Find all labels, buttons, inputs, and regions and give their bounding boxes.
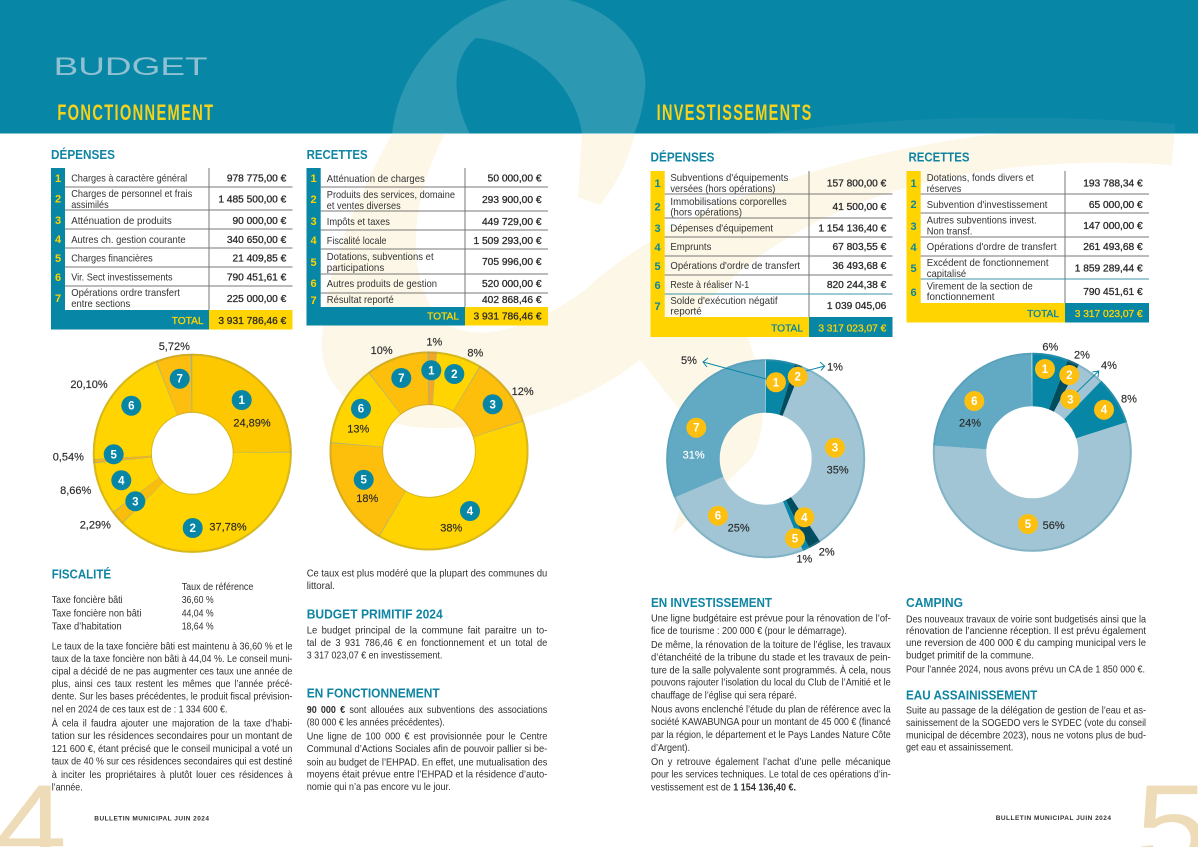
text block: en investissement: De même, la rénovation de la toiture de l’église, les travaux <box>651 639 891 651</box>
table: dépenses fonctionnement: 3 <box>55 215 61 227</box>
table: dépenses investissements: 4 <box>655 242 662 254</box>
text block: en investissement: On y retrouve également l’achat d’une pelle mécanique <box>651 756 891 768</box>
table: dépenses fonctionnement: 1 <box>55 173 61 185</box>
table: recettes investissements: Non transf. <box>927 226 972 238</box>
text block: taux modéré: Ce taux est plus modéré que la plupart des communes du <box>307 568 547 580</box>
chart: donut dépenses fonctionnement: 5 <box>110 449 117 461</box>
chart: donut recettes fonctionnement: 3 <box>489 399 496 411</box>
text block: eau assainissement: get eau et assainissement. <box>906 742 1013 754</box>
table: dépenses investissements: 41 500,00 € <box>832 202 887 213</box>
chart: donut recettes fonctionnement: 5 <box>360 475 367 487</box>
table: recettes investissements: 147 000,00 € <box>1083 221 1143 232</box>
text block: fiscalité: Taux de référence <box>182 581 254 593</box>
text block: fiscalité: Taxe foncière bâti <box>52 594 123 606</box>
text block: budget primitif 2024: BUDGET PRIMITIF 2024 <box>307 606 443 621</box>
text block: camping <box>906 595 1146 676</box>
chart: donut dépenses fonctionnement: 5,72% <box>159 341 190 353</box>
chart: donut recettes investissements: 6 <box>971 396 978 408</box>
chart: donut dépenses investissements: 3 <box>832 443 838 455</box>
table: dépenses investissements: (hors opérations) <box>670 206 742 218</box>
footer left: BULLETIN MUNICIPAL JUIN 2024 <box>94 816 209 823</box>
table: dépenses investissements: Solde d'exécution négatif <box>670 295 778 307</box>
text block: en investissement: vestissement est de 1 154 136,40 €. <box>651 781 796 793</box>
table: recettes fonctionnement: 3 931 786,46 € <box>474 312 542 323</box>
chart: donut dépenses fonctionnement: 7 <box>176 374 183 386</box>
chart: donut dépenses investissements: 4 <box>801 512 808 524</box>
chart: donut dépenses investissements: 1 <box>773 377 780 389</box>
footer right: BULLETIN MUNICIPAL JUIN 2024 <box>996 815 1111 822</box>
chart: donut recettes fonctionnement: 1 <box>428 365 435 377</box>
table: dépenses fonctionnement: assimilés <box>71 199 109 211</box>
text block: taux modéré <box>307 568 547 592</box>
chart: donut recettes investissements: 8% <box>1121 394 1137 406</box>
text block: en investissement: d’étanchéité de la tribune du stade et les travaux de pein- <box>651 652 891 664</box>
text block: fiscalité: dente. Sur les bases précédentes, le produit fiscal prévision- <box>52 691 293 703</box>
text block: fiscalité: l’année. <box>52 781 83 793</box>
chart: donut dépenses investissements: 2 <box>794 372 801 384</box>
text block: fiscalité: Taxe foncière non bâti <box>52 607 141 619</box>
text block: camping: budget primitif de la commune. <box>906 649 1034 661</box>
chart: donut recettes fonctionnement: 7 <box>398 373 405 385</box>
text block: eau assainissement: EAU ASSAINISSEMENT <box>906 687 1037 702</box>
chart: donut dépenses investissements <box>667 355 864 565</box>
table: dépenses investissements: 2 <box>655 202 661 214</box>
heading: investissements: INVESTISSEMENTS <box>657 100 813 125</box>
table: recettes investissements: 1 <box>911 178 917 190</box>
table: recettes investissements: Dotations, fonds divers et <box>927 172 1034 184</box>
text block: camping: Pour l’année 2024, nous avons prévu un CA de 1 850 000 €. <box>906 664 1145 676</box>
chart: donut recettes fonctionnement: 10% <box>371 345 393 357</box>
table: recettes investissements: 6 <box>911 287 917 299</box>
table: recettes investissements: 3 <box>911 221 917 233</box>
text block: camping: une reversion de 400 000 € du camping municipal vers le <box>906 637 1146 649</box>
chart: donut dépenses investissements: 5 <box>792 533 799 545</box>
chart: donut recettes fonctionnement: 18% <box>356 493 379 505</box>
text block: fiscalité: 18,64 % <box>182 620 214 632</box>
chart: donut recettes fonctionnement: 1% <box>426 337 442 349</box>
table: dépenses fonctionnement: 340 650,00 € <box>227 235 287 246</box>
table: recettes fonctionnement: 2 <box>311 194 317 206</box>
chart: donut recettes investissements: 24% <box>959 418 981 430</box>
table: dépenses investissements: Emprunts <box>670 241 711 253</box>
chart: donut recettes fonctionnement: 4 <box>467 506 474 518</box>
table: dépenses investissements: versées (hors opérations) <box>670 183 775 195</box>
text block: en fonctionnement: Une ligne de 100 000 € est provisionnée pour le Centre <box>307 731 547 743</box>
table: dépenses fonctionnement: 6 <box>55 272 61 284</box>
table: recettes investissements: 5 <box>911 263 917 275</box>
chart: donut recettes investissements: 4 <box>1101 405 1108 417</box>
chart: donut dépenses fonctionnement: 6 <box>128 401 135 413</box>
table: recettes investissements: 65 000,00 € <box>1089 200 1143 211</box>
text block: fiscalité: taux de 40 % sur ces résidences secondaires qui est destiné <box>52 756 293 768</box>
text block: budget primitif 2024: 3 317 023,07 € en investissement. <box>307 649 442 661</box>
chart: donut recettes investissements: 6% <box>1042 341 1058 353</box>
header band <box>0 0 1198 134</box>
table: recettes fonctionnement: TOTAL <box>427 312 459 323</box>
text block: en fonctionnement: 90 000 € sont allouées aux subventions des associations <box>307 704 547 716</box>
chart: donut dépenses fonctionnement: 20,10% <box>70 379 108 391</box>
chart: donut recettes investissements: 2% <box>1074 349 1090 361</box>
text block: fiscalité: À cela il faudra ajouter une majoration de la taxe d’habi- <box>52 716 293 729</box>
table: recettes fonctionnement: 402 868,46 € <box>482 295 542 306</box>
chart: donut recettes investissements: 3 <box>1067 394 1074 406</box>
chart: donut dépenses investissements: 25% <box>728 523 750 535</box>
text block: fiscalité: FISCALITÉ <box>52 566 111 582</box>
text block: budget primitif 2024 <box>307 606 548 661</box>
text block: camping: CAMPING <box>906 595 963 610</box>
text block: en investissement: EN INVESTISSEMENT <box>651 595 772 610</box>
text block: fiscalité: 121 600 €, étant précisé que le conseil municipal a voté un <box>52 743 293 755</box>
table: dépenses investissements: Dépenses d'équipement <box>670 222 773 234</box>
table: dépenses fonctionnement: Vir. Sect investissements <box>71 272 173 284</box>
table: dépenses investissements: 5 <box>655 261 661 273</box>
table: dépenses fonctionnement: 1 485 500,00 € <box>218 194 287 206</box>
panel: fonctionnement recettes <box>306 147 548 326</box>
table: recettes fonctionnement: Impôts et taxes <box>327 216 390 228</box>
text block: en investissement: Une ligne budgétaire est prévue pour la rénovation de l’of- <box>651 613 891 625</box>
chart: donut recettes investissements: 4% <box>1101 360 1117 372</box>
chart: donut dépenses fonctionnement: 2 <box>189 523 196 535</box>
text block: eau assainissement: municipal de décembre 2023), nous ne votons plus de bud- <box>906 729 1146 741</box>
chart: donut dépenses investissements: 35% <box>827 464 849 476</box>
text block: fiscalité: nel en 2024 de ces taux est de : 1 334 600 €. <box>52 703 227 715</box>
table: recettes fonctionnement: 3 <box>311 216 317 228</box>
text block: en investissement: fice de tourisme : 200 000 € (pour le démarrage). <box>651 625 847 637</box>
table: recettes investissements: Opérations d'ordre de transfert <box>927 241 1057 253</box>
text block: camping: rénovation de l’ancienne réception. Il est prévu également <box>906 625 1146 637</box>
table: dépenses investissements: 7 <box>655 301 661 313</box>
text block: budget primitif 2024: Le budget principal de la commune fait paraitre un to- <box>307 625 548 637</box>
table: recettes investissements: 193 788,34 € <box>1083 178 1143 190</box>
table: dépenses fonctionnement: 978 775,00 € <box>227 174 287 184</box>
table: dépenses fonctionnement: Autres ch. gestion courante <box>71 234 186 246</box>
table: recettes investissements: 261 493,68 € <box>1083 242 1143 253</box>
table: dépenses investissements: 3 <box>655 223 661 235</box>
chart: donut dépenses fonctionnement: 37,78% <box>209 522 247 534</box>
table: dépenses fonctionnement: 790 451,61 € <box>227 272 287 284</box>
table: dépenses investissements: 1 <box>655 178 661 190</box>
text block: en investissement: pouvons rajouter l’isolation du local du Club de l’Amitié et le <box>651 677 891 689</box>
table: recettes investissements: réserves <box>927 183 961 195</box>
table: dépenses investissements <box>650 171 892 337</box>
table: dépenses investissements: 157 800,00 € <box>827 178 887 190</box>
chart: donut recettes fonctionnement: 6 <box>358 404 364 416</box>
text block: en fonctionnement: nomie qui n’a pas encore vu le jour. <box>307 781 451 793</box>
chart: donut recettes fonctionnement: 38% <box>440 522 463 534</box>
table: dépenses investissements: 1 154 136,40 € <box>818 224 887 234</box>
table: dépenses fonctionnement: TOTAL <box>172 316 204 327</box>
table: dépenses investissements: Immobilisations corporelles <box>670 196 787 208</box>
table: recettes investissements: Subvention d'investissement <box>927 199 1047 211</box>
text block: en fonctionnement: EN FONCTIONNEMENT <box>307 685 440 700</box>
table: dépenses fonctionnement: 21 409,85 € <box>232 254 287 264</box>
table: recettes investissements: 2 <box>911 199 917 211</box>
table: dépenses investissements: 67 803,55 € <box>832 242 887 253</box>
table: recettes investissements: Autres subventions invest. <box>927 214 1037 226</box>
text block: en investissement: pour les services techniques. Le total de ces opérations d’in- <box>651 768 891 780</box>
text block: fiscalité <box>52 566 293 793</box>
chart: donut dépenses fonctionnement: 0,54% <box>53 451 84 463</box>
text block: en fonctionnement: moyens était prévue entre l’EHPAD et la résidence d’auto- <box>307 769 548 781</box>
table: recettes fonctionnement: 5 <box>311 257 317 269</box>
chart: donut recettes fonctionnement <box>330 337 534 550</box>
text block: taux modéré: littoral. <box>307 580 335 592</box>
panel: investissements recettes <box>906 150 1149 322</box>
text block: en investissement: Nous avons enclenché l’étude du plan de référence avec la <box>651 703 891 715</box>
panel: investissements dépenses <box>650 150 892 337</box>
background: pale ampersand shape <box>322 125 1175 535</box>
heading: recettes: RECETTES <box>307 147 368 162</box>
table: dépenses fonctionnement: 7 <box>55 293 61 305</box>
table: dépenses fonctionnement: 3 931 786,46 € <box>218 316 287 327</box>
chart: donut dépenses investissements: 7 <box>693 423 700 435</box>
table: dépenses fonctionnement: 90 000,00 € <box>232 216 287 227</box>
text block: en investissement: d’Argent). <box>651 742 690 754</box>
chart: donut dépenses investissements: 1% <box>796 553 812 565</box>
table: recettes investissements: fonctionnement <box>927 291 995 303</box>
chart: donut recettes fonctionnement: 8% <box>467 347 483 359</box>
text block: fiscalité: 36,60 % <box>182 594 214 606</box>
table: recettes investissements: capitalisé <box>927 268 966 280</box>
text block: en investissement: ture de la salle polyvalente sont programmés. À cela, nous <box>651 663 891 676</box>
text block: fiscalité: tation sur les résidences secondaires pour un montant de <box>52 730 293 742</box>
table: recettes fonctionnement: Fiscalité locale <box>327 235 387 247</box>
table: recettes investissements: TOTAL <box>1027 309 1059 320</box>
table: recettes fonctionnement: Produits des services, domaine <box>327 189 455 201</box>
table: dépenses fonctionnement: Charges à caractère général <box>71 172 187 184</box>
heading: dépenses: DÉPENSES <box>51 147 115 162</box>
table: recettes investissements: 1 859 289,44 € <box>1075 264 1143 274</box>
chart: donut recettes investissements <box>934 341 1137 551</box>
table: recettes fonctionnement: Dotations, subventions et <box>327 251 434 263</box>
chart: donut dépenses fonctionnement: 2,29% <box>80 519 111 531</box>
table: dépenses investissements: TOTAL <box>771 324 803 334</box>
table: dépenses investissements: Reste à réaliser N-1 <box>670 279 749 291</box>
text block: en fonctionnement <box>307 685 548 793</box>
chart: donut dépenses fonctionnement: 24,89% <box>233 417 271 429</box>
heading: dépenses: DÉPENSES <box>650 150 715 164</box>
table: recettes fonctionnement: 520 000,00 € <box>482 279 542 290</box>
table: recettes fonctionnement: 7 <box>311 295 317 307</box>
table: recettes investissements: Virement de la section de <box>927 280 1033 292</box>
table: dépenses investissements: reporté <box>670 306 702 318</box>
chart: donut recettes fonctionnement: 13% <box>347 424 370 436</box>
chart: donut dépenses fonctionnement: 3 <box>132 496 139 508</box>
table: recettes fonctionnement <box>306 168 548 326</box>
chart: donut dépenses fonctionnement: 8,66% <box>60 485 92 497</box>
text block: en investissement <box>651 595 891 793</box>
table: dépenses fonctionnement: Charges de personnel et frais <box>71 188 192 200</box>
text block: fiscalité: à inciter les propriétaires à plutôt louer ces résidences à <box>52 769 293 781</box>
text block: en investissement: chauffage de l’église qui sera réparé. <box>651 689 797 701</box>
chart: donut dépenses investissements: 31% <box>683 450 705 462</box>
table: dépenses investissements: 820 244,38 € <box>827 280 887 291</box>
table: dépenses investissements: Subventions d'équipements <box>670 172 788 184</box>
table: dépenses fonctionnement <box>51 168 292 330</box>
chart: donut recettes investissements: 1 <box>1042 364 1049 376</box>
table: recettes fonctionnement: participations <box>327 262 384 274</box>
table: recettes fonctionnement: Atténuation de charges <box>327 173 425 185</box>
arrows: callouts 5% and 1% <box>703 358 825 380</box>
table: recettes investissements: 790 451,61 € <box>1083 287 1143 298</box>
text block: fiscalité: Taxe d’habitation <box>52 620 122 632</box>
table: dépenses fonctionnement: Atténuation de produits <box>71 215 172 227</box>
text block: eau assainissement <box>906 687 1146 754</box>
table: dépenses fonctionnement: 5 <box>55 253 61 265</box>
table: recettes fonctionnement: 1 <box>311 173 317 185</box>
table: dépenses investissements: 6 <box>655 280 661 292</box>
text block: fiscalité: Le taux de la taxe foncière bâti est maintenu à 36,60 % et le <box>52 640 293 652</box>
table: dépenses fonctionnement: Opérations ordre transfert <box>71 287 180 299</box>
chart: donut recettes fonctionnement: 12% <box>512 386 534 398</box>
table: recettes fonctionnement: 449 729,00 € <box>482 217 542 228</box>
text block: en fonctionnement: Communal d’Actions Sociales afin de pouvoir pallier si be- <box>307 743 548 755</box>
text block: fiscalité: cipal a décidé de ne pas augmenter ces taux une année de <box>52 665 293 677</box>
text block: en fonctionnement: soin au budget de l’EHPAD. En effet, une mutualisation des <box>307 756 547 768</box>
table: recettes investissements: 4 <box>911 242 918 254</box>
text block: camping: Des nouveaux travaux de voirie sont budgetisés ainsi que la <box>906 613 1146 625</box>
table: dépenses investissements: Opérations d'ordre de transfert <box>670 260 800 272</box>
table: recettes fonctionnement: 6 <box>311 278 317 290</box>
table: dépenses investissements: 1 039 045,06 <box>827 301 887 312</box>
table: recettes fonctionnement: et ventes diverses <box>327 200 401 212</box>
chart: donut dépenses investissements: 1% <box>827 361 843 373</box>
chart: donut recettes investissements: 56% <box>1043 520 1065 532</box>
table: recettes fonctionnement: 293 900,00 € <box>482 195 542 206</box>
chart: donut recettes investissements: 5 <box>1025 519 1032 531</box>
text block: fiscalité: 44,04 % <box>182 607 214 619</box>
title: budget: BUDGET <box>54 53 208 81</box>
chart: donut dépenses investissements: 6 <box>715 511 721 523</box>
table: dépenses investissements: 3 317 023,07 € <box>818 324 887 334</box>
text block: budget primitif 2024: tal de 3 931 786,46 € en fonctionnement et un total de <box>307 637 547 649</box>
table: recettes fonctionnement: 50 000,00 € <box>488 174 542 184</box>
chart: donut dépenses fonctionnement <box>53 341 291 552</box>
chart: donut recettes fonctionnement: 2 <box>451 369 458 381</box>
table: recettes fonctionnement: 4 <box>311 235 318 247</box>
table: dépenses fonctionnement: entre sections <box>71 298 130 310</box>
text block: eau assainissement: sainissement de la SOGEDO vers le SYDEC (vote du conseil <box>906 717 1146 729</box>
chart: donut dépenses investissements: 5% <box>681 355 697 367</box>
table: recettes investissements: Excédent de fonctionnement <box>927 257 1049 269</box>
table: recettes fonctionnement: Autres produits de gestion <box>327 278 437 290</box>
text block: eau assainissement: Suite au passage de la délégation de gestion de l’eau et as- <box>906 705 1146 717</box>
table: dépenses fonctionnement: 2 <box>55 194 61 206</box>
heading: recettes: RECETTES <box>908 150 970 164</box>
table: dépenses investissements: 36 493,68 € <box>832 261 887 272</box>
panel: fonctionnement dépenses <box>51 147 292 330</box>
text block: en investissement: société KAWABUNGA pour un montant de 45 000 € (financé <box>651 716 891 728</box>
arrow: callout 4% <box>1076 371 1099 393</box>
chart: donut dépenses investissements: 2% <box>819 547 835 559</box>
text block: fiscalité: plus, ainsi ces taux restent les mêmes que l’année précé- <box>52 678 293 690</box>
table: dépenses fonctionnement: 225 000,00 € <box>227 294 287 305</box>
table: dépenses fonctionnement: 4 <box>55 234 62 246</box>
table: dépenses fonctionnement: Charges financières <box>71 252 153 264</box>
text block: en fonctionnement: (80 000 € les années précédentes). <box>307 716 445 728</box>
table: recettes fonctionnement: Résultat reporté <box>327 294 394 306</box>
chart: donut dépenses fonctionnement: 1 <box>238 395 245 407</box>
table: recettes fonctionnement: 1 509 293,00 € <box>474 236 542 247</box>
table: recettes fonctionnement: 705 996,00 € <box>482 257 542 268</box>
text block: fiscalité: taux de la taxe foncière non bâti à 44,04 %. Le conseil muni- <box>52 653 293 665</box>
chart: donut dépenses fonctionnement: 4 <box>118 475 125 487</box>
chart: donut recettes investissements: 2 <box>1066 370 1073 382</box>
text block: en investissement: par la région, le département et le Pays Landes Nature Côte <box>651 729 891 741</box>
heading: fonctionnement: FONCTIONNEMENT <box>57 100 214 125</box>
table: recettes investissements: 3 317 023,07 € <box>1075 309 1143 320</box>
table: recettes investissements <box>906 171 1149 322</box>
